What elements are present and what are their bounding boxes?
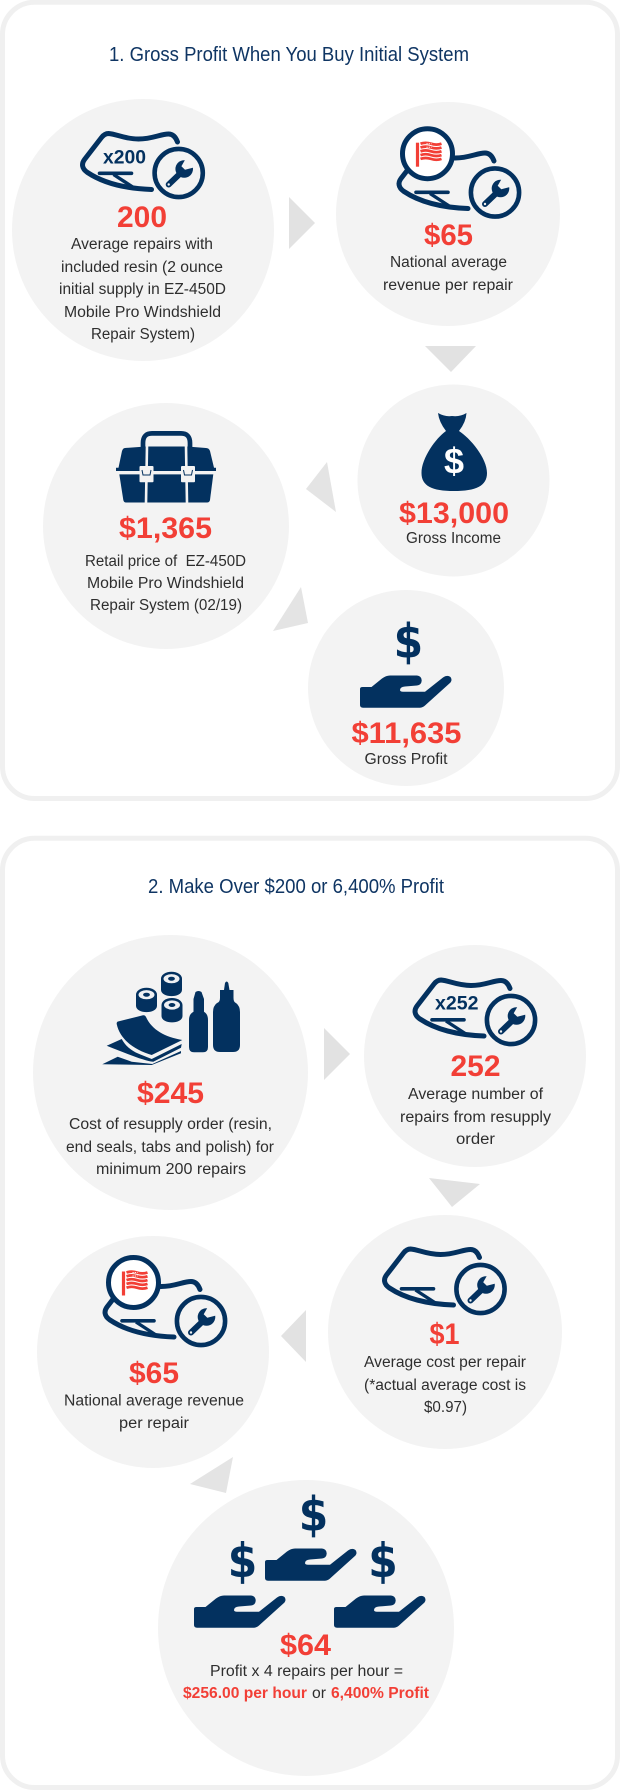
text: resupply order description: Cost of resupply order (resin,	[69, 1116, 272, 1133]
text: resupply order description: minimum 200 repairs	[96, 1161, 246, 1178]
text: repairs from resupply description	[400, 1086, 551, 1148]
text: average repairs description: included resin (2 ounce	[61, 259, 223, 276]
icon: windshield with flag and wrench	[105, 1258, 225, 1345]
icon: windshield with x252 and wrench	[415, 980, 535, 1044]
arrow: step 2 to step 3	[429, 1178, 480, 1207]
panel: gross profit when you buy initial system	[2, 2, 618, 799]
arrow: step 1 to step 2	[289, 197, 315, 249]
text: national average revenue: revenue per repair	[383, 277, 513, 294]
icon: three hands with dollars: $	[368, 1534, 398, 1589]
text: profit per hour: 6,400% Profit	[331, 1685, 429, 1702]
icon: windshield with x252 and wrench: x252	[435, 994, 478, 1014]
arrow: step 3 to step 4	[306, 462, 336, 512]
step: 200 average repairs	[12, 99, 274, 361]
step: $1,365 retail price	[43, 403, 289, 649]
arrow: step 2 to step 3	[425, 346, 476, 372]
arrow: step 3 to step 4	[281, 1310, 306, 1362]
heading: section 2: 2. Make Over $200 or 6,400% Profit	[148, 876, 444, 898]
text: profit per hour: $256.00 per hour	[183, 1685, 307, 1702]
text: repairs from resupply description: order	[456, 1131, 495, 1148]
step: $1 average cost per repair	[328, 1215, 562, 1449]
number: $11,635: $11,635	[352, 717, 462, 750]
icon: three hands with dollars: $	[228, 1534, 257, 1589]
text: average repairs description: Mobile Pro Windshield	[64, 304, 221, 321]
icon: windshield with flag and wrench	[399, 129, 519, 217]
arrow: step 4 to step 5	[273, 587, 308, 631]
icon: toolbox	[116, 433, 216, 503]
panel: make over $200 or 6,400% profit	[2, 838, 618, 1788]
text: national average revenue: National average revenue	[64, 1392, 244, 1410]
text: resupply order description	[66, 1116, 274, 1178]
number: $1,365: $1,365	[119, 512, 212, 545]
step: $65 revenue per repair	[336, 102, 560, 326]
step: $245 resupply order	[33, 935, 308, 1210]
step: $64 profit	[158, 1480, 454, 1776]
icon: money bag	[422, 413, 487, 491]
text: average repairs description: Repair System)	[91, 326, 195, 343]
text: repairs from resupply description: repairs from resupply	[400, 1109, 551, 1126]
number: $13,000: $13,000	[399, 497, 509, 530]
icon: three hands with dollars	[194, 1488, 426, 1628]
step: $11,635 gross profit	[308, 590, 504, 786]
step: $13,000 gross income	[358, 384, 550, 576]
text: average cost description: $0.97)	[424, 1399, 467, 1416]
heading: section 1: 1. Gross Profit When You Buy Initial System	[109, 44, 469, 66]
text: national average revenue: per repair	[119, 1415, 189, 1432]
text: profit per hour: Profit x 4 repairs per hour =	[210, 1663, 403, 1680]
number: $1: $1	[430, 1318, 460, 1351]
text: profit per hour	[183, 1663, 429, 1702]
text: retail price description: Repair System (02/19)	[90, 597, 242, 614]
text: gross profit: Gross Profit	[364, 751, 448, 768]
icon: money bag: $	[444, 440, 464, 482]
text: average repairs description: Average repairs with	[71, 236, 213, 253]
text: average repairs description: initial supply in EZ-450D	[59, 281, 226, 298]
number: $65: $65	[129, 1357, 179, 1390]
text: average cost description: Average cost per repair	[364, 1354, 526, 1371]
text: retail price description: Retail price of EZ-450D	[85, 553, 246, 570]
number: 200: 200	[117, 201, 167, 234]
arrow: step 4 to step 5	[190, 1457, 233, 1493]
icon: hand with dollar	[360, 614, 452, 708]
number: $245: $245	[137, 1077, 204, 1110]
text: national average revenue: National average	[390, 254, 507, 271]
icon: resupply kit	[102, 972, 240, 1065]
number: 252: 252	[450, 1050, 500, 1083]
icon: windshield with wrench	[385, 1249, 505, 1313]
text: retail price description	[85, 553, 246, 614]
icon: hand with dollar: $	[394, 614, 423, 669]
text: repairs from resupply description: Average number of	[408, 1086, 544, 1103]
number: $65: $65	[424, 219, 473, 252]
text: average repairs description	[59, 236, 226, 343]
text: national average revenue	[383, 254, 513, 294]
step: $65 revenue per repair	[37, 1236, 269, 1468]
icon: three hands with dollars: $	[299, 1488, 328, 1542]
text: resupply order description: end seals, tabs and polish) for	[66, 1139, 274, 1156]
number: $64: $64	[280, 1629, 332, 1662]
text: average cost description: (*actual average cost is	[364, 1377, 526, 1394]
icon: windshield with x200 and wrench: x200	[103, 147, 146, 168]
text: gross income: Gross Income	[406, 530, 501, 547]
text: retail price description: Mobile Pro Windshield	[87, 575, 244, 592]
text: profit per hour: or	[312, 1685, 326, 1702]
text: national average revenue	[64, 1392, 244, 1432]
icon: windshield with x200 and wrench	[83, 134, 203, 197]
text: average cost description	[364, 1354, 526, 1416]
arrow: step 1 to step 2	[324, 1028, 350, 1080]
step: 252 repairs from resupply	[364, 945, 586, 1167]
